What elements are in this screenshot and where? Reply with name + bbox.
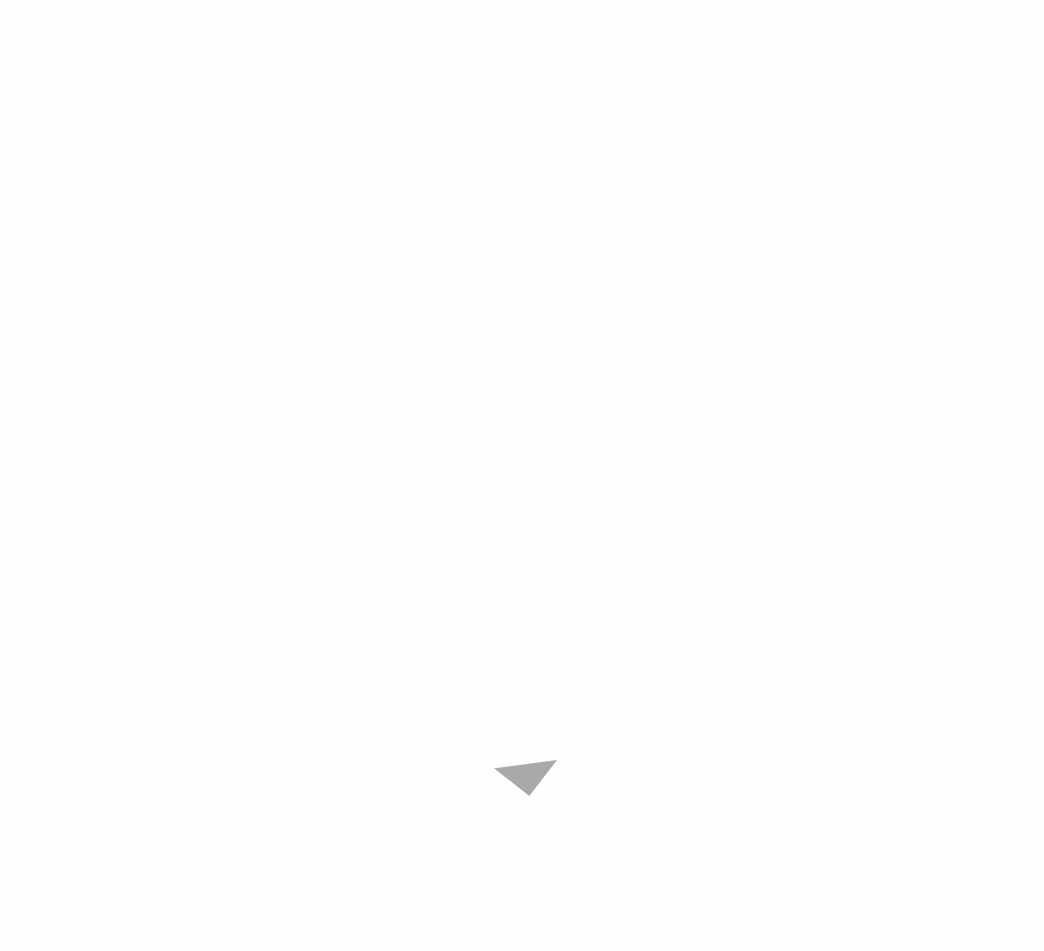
icon: grey triangle	[494, 760, 557, 796]
